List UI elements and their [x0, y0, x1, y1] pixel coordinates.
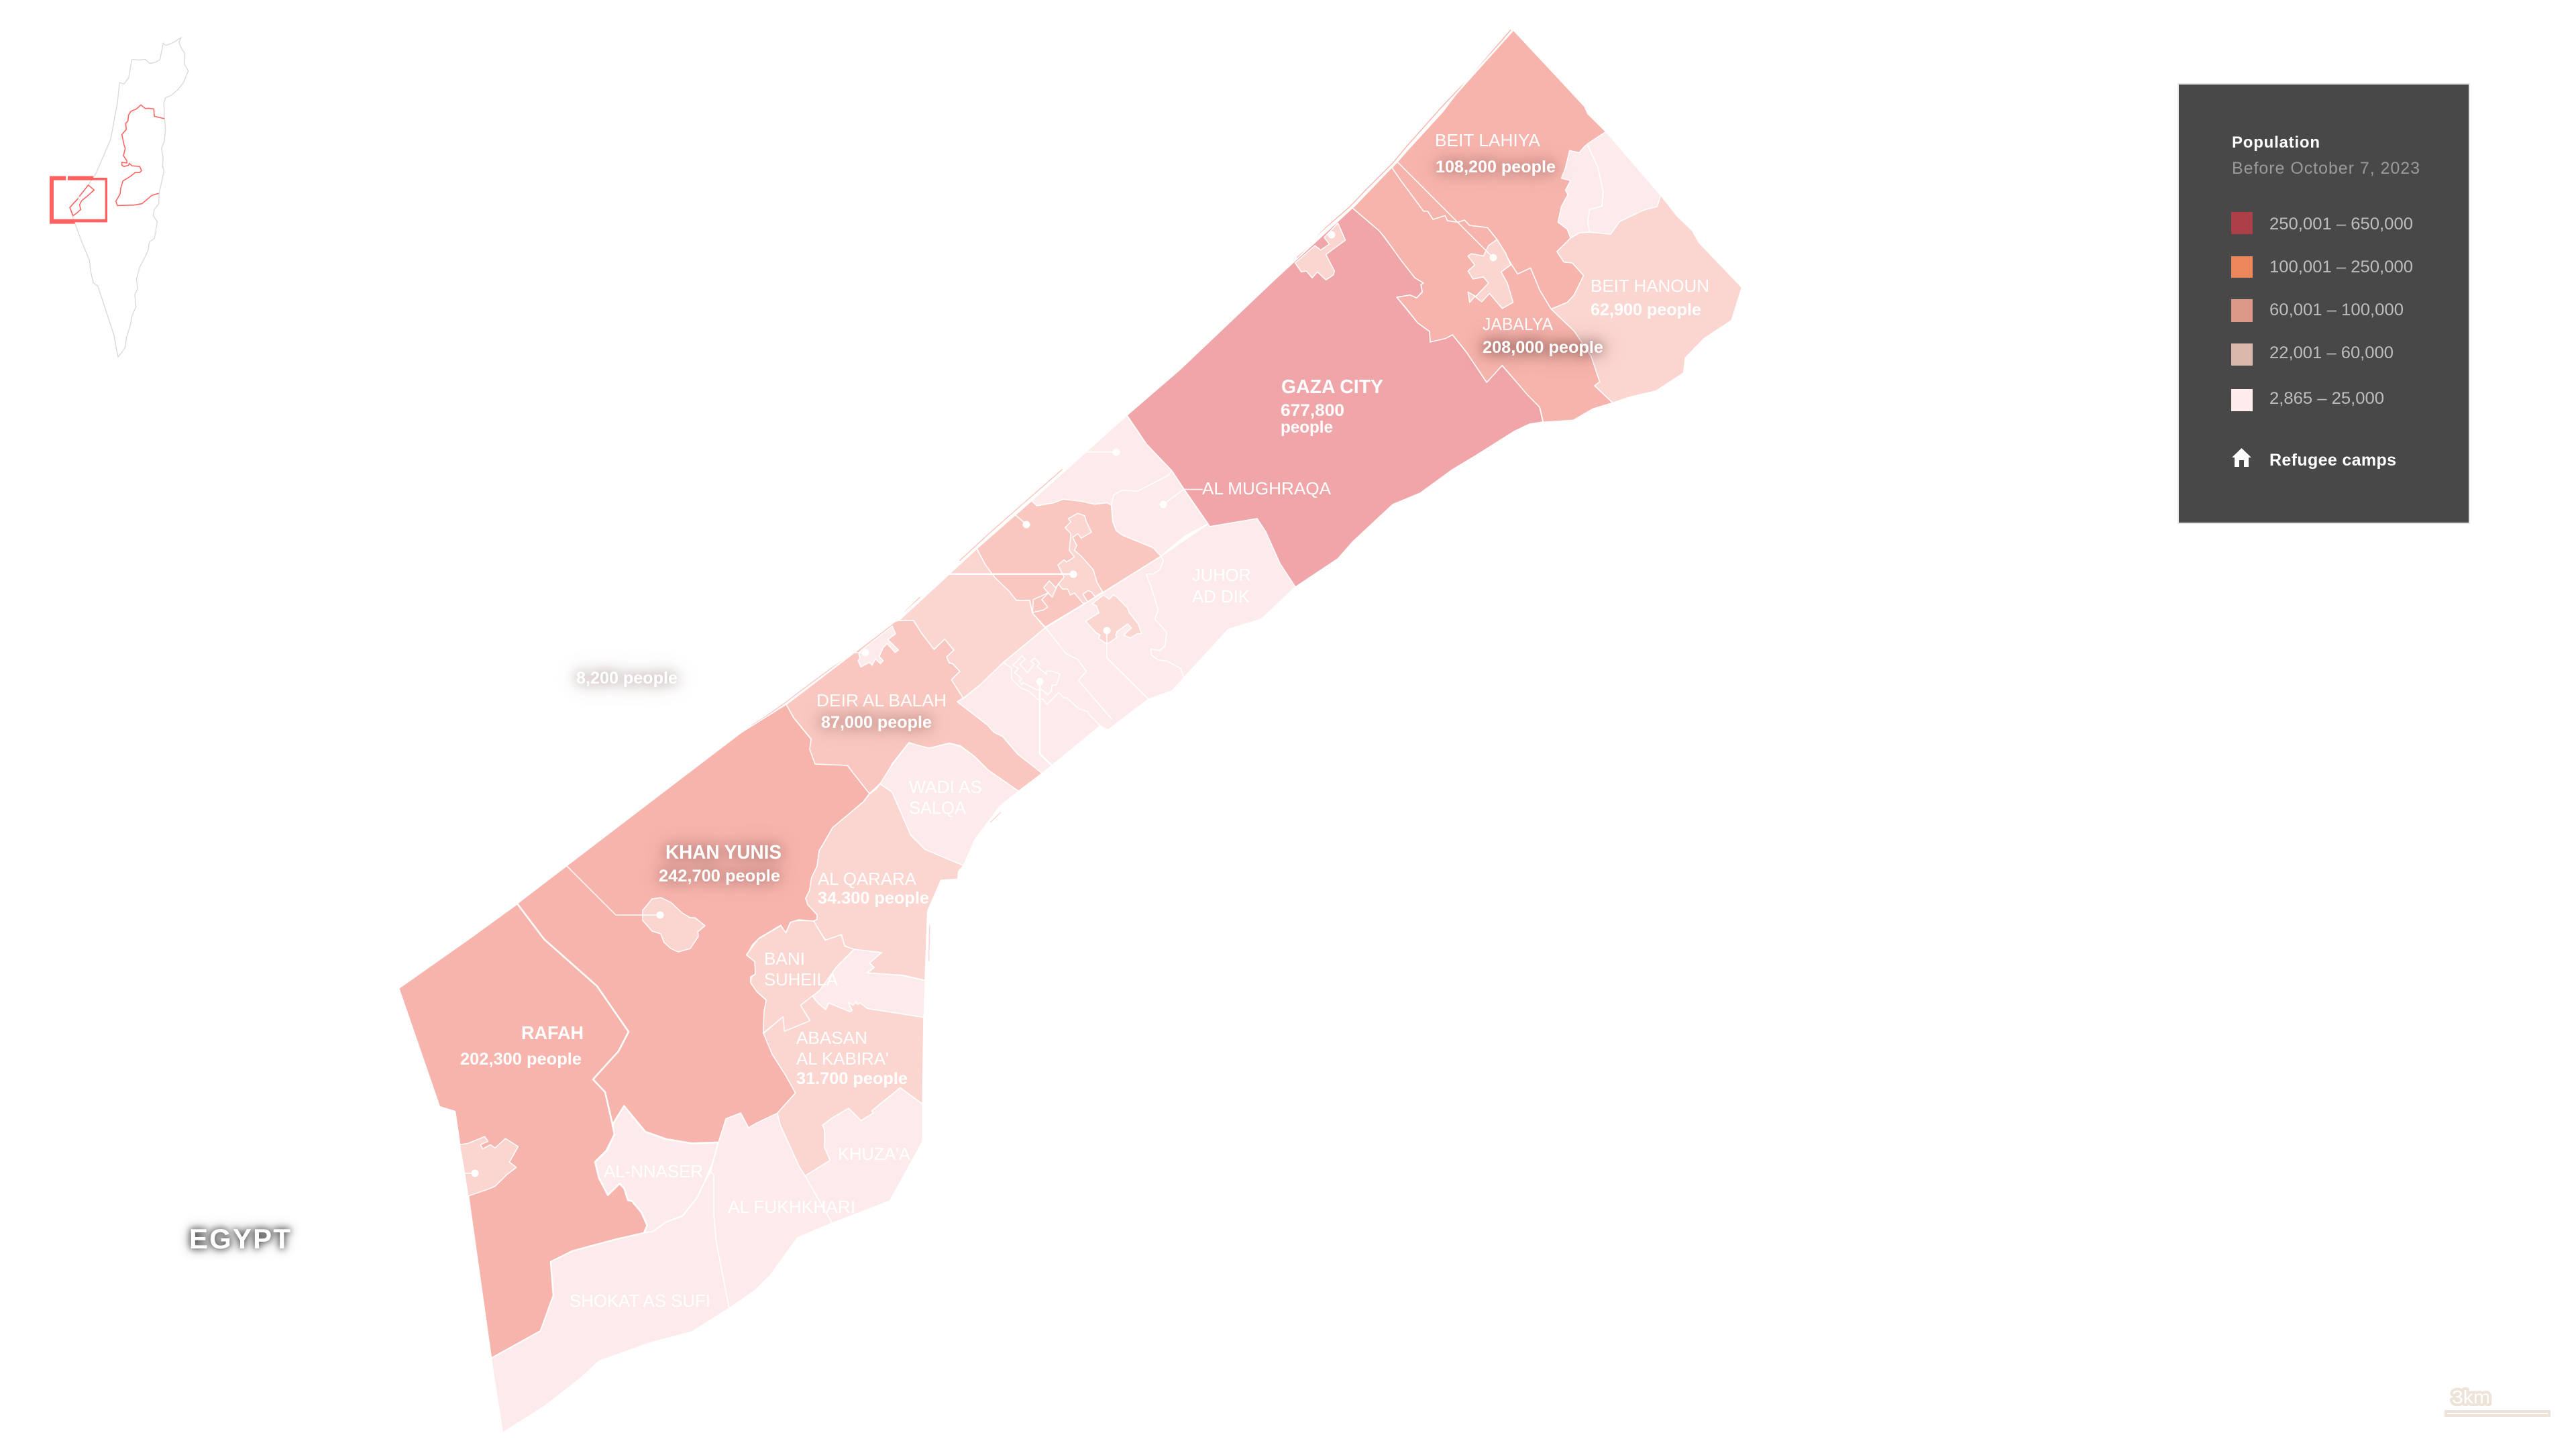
legend item: 100,001 – 250,000: 100,001 – 250,000 — [2269, 258, 2413, 276]
coast line north — [1275, 31, 1513, 279]
region group: north governorate — [1275, 30, 1741, 422]
region: Rafah — [398, 904, 647, 1358]
region: Jabalya — [1352, 162, 1613, 422]
legend item: refugee camps: Refugee camps — [2269, 451, 2396, 470]
region: Al Qarara — [806, 784, 963, 980]
label: Egypt: EGYPT — [189, 1223, 290, 1254]
legend item: 22,001 – 60,000 — [2231, 343, 2394, 366]
label: Wadi as Salqa: WADI AS — [909, 777, 982, 797]
inset: country outline — [70, 38, 189, 357]
camp leader: Jabalya — [1397, 162, 1493, 258]
label: Juhor ad Dik — [1192, 565, 1251, 606]
label: Gaza City: GAZA CITY — [1281, 376, 1383, 398]
region: Bani Suheila — [747, 920, 854, 1033]
label: Al Mughraqa: AL MUGHRAQA — [1202, 478, 1332, 498]
region group: Bani Suheila — [747, 920, 925, 1033]
region: Umm an-Nasr pale area — [1558, 131, 1661, 238]
inset: Gaza outline — [70, 185, 94, 215]
label: Jabalya: 208,000 people — [1483, 338, 1603, 357]
label: Gaza City: people — [1281, 418, 1333, 437]
label: Abasan Al Kabira: 31.700 people — [796, 1069, 908, 1088]
region: Abasan Al Kabira — [763, 996, 924, 1176]
icon: house — [2232, 448, 2251, 467]
legend item: 2,865 – 25,000 — [2231, 389, 2384, 411]
label: Khan Yunis: 242,700 people — [659, 867, 780, 885]
scale label: 3km — [2452, 1387, 2490, 1407]
legend item: 100,001 – 250,000 — [2231, 256, 2413, 278]
label: Jabalya — [1483, 314, 1603, 357]
label: Abasan Al Kabira — [796, 1028, 908, 1088]
legend title: Population — [2232, 133, 2320, 152]
label: Khan Yunis — [659, 842, 782, 885]
legend item: 2,865 – 25,000: 2,865 – 25,000 — [2269, 389, 2384, 408]
label: Beit Hanoun: BEIT HANOUN — [1591, 276, 1709, 296]
label: sea population: 8,200 people — [576, 669, 678, 688]
place labels — [189, 130, 1709, 1311]
region group: middle area north — [977, 415, 1208, 627]
legend item: 60,001 – 100,000: 60,001 – 100,000 — [2269, 301, 2404, 319]
label: Rafah — [460, 1022, 584, 1069]
region: Shokat as Sufi — [491, 1172, 729, 1433]
refugee camp: Nuseirat — [1044, 513, 1103, 603]
refugee camp: Rafah — [460, 1136, 518, 1196]
label: Beit Lahiya: 108,200 people — [1436, 158, 1556, 176]
camp markers — [471, 231, 1497, 1177]
region: Wadi as Salqa — [880, 743, 1019, 865]
label: Khan Yunis: KHAN YUNIS — [665, 842, 782, 863]
label: Beit Hanoun: 62,900 people — [1591, 301, 1701, 319]
scale bar — [2445, 1387, 2551, 1417]
label: Al-Nnaser: AL-NNASER — [604, 1161, 703, 1181]
label: Jabalya: JABALYA — [1483, 314, 1554, 334]
inset: highlight frame — [50, 176, 107, 224]
refugee camps: Bureij and Maghazi — [1004, 595, 1142, 726]
label: Deir Al Balah: DEIR AL BALAH — [816, 690, 947, 710]
label: Wadi as Salqa: SALQA — [909, 798, 967, 818]
camp leader lines and markers — [460, 231, 1497, 1177]
label: Al Qarara: AL QARARA — [818, 869, 917, 889]
label: Bani Suheila: BANI — [764, 949, 805, 969]
leader lines — [948, 452, 1203, 765]
legend item: refugee camps — [2232, 448, 2396, 470]
region: Nuseirat — [977, 499, 1161, 627]
refugee camp: Khan Yunis — [643, 898, 705, 952]
region: Beit Hanoun — [1551, 195, 1741, 402]
coastal slivers — [751, 30, 1511, 961]
label: Deir Al Balah: 87,000 people — [821, 713, 932, 732]
region: Khuza'a — [805, 1088, 922, 1223]
label: Khuza'a: KHUZA'A — [838, 1144, 911, 1164]
region: Al-Nnaser — [595, 1106, 718, 1233]
internal boundaries: middle area — [1045, 556, 1184, 719]
region: Gaza City — [1127, 208, 1543, 587]
label: Shokat as Sufi: SHOKAT AS SUFI — [570, 1291, 710, 1311]
label: Bani Suheila — [764, 949, 839, 989]
region: Bureij, Maghazi and Juhor ad Dik — [957, 519, 1295, 773]
legend item: 250,001 – 650,000 — [2231, 212, 2413, 234]
label: Juhor ad Dik: JUHOR — [1192, 565, 1251, 585]
label: Gaza City — [1281, 376, 1383, 437]
region: Deir Al Balah — [738, 574, 1042, 794]
region group: Al Qarara and Wadi as Salqa — [806, 743, 1019, 980]
label: Abasan Al Kabira: AL KABIRA' — [796, 1049, 889, 1069]
legend item: 250,001 – 650,000: 250,001 – 650,000 — [2269, 215, 2413, 233]
region: Al Mughraqa pale area — [1032, 415, 1208, 556]
label: Beit Lahiya: BEIT LAHIYA — [1435, 130, 1541, 150]
inset locator map — [50, 38, 189, 357]
region: Al Fukhkhari — [710, 1113, 832, 1308]
refugee camp: Deir Al Balah — [858, 626, 898, 667]
label: Wadi as Salqa — [909, 777, 982, 818]
label: Bani Suheila: SUHEILA — [764, 969, 839, 989]
refugee camp: Beach — [1295, 223, 1346, 280]
label: Gaza City: 677,800 — [1281, 401, 1344, 420]
label: Rafah: 202,300 people — [460, 1050, 582, 1069]
label: Abasan Al Kabira: ABASAN — [796, 1028, 867, 1048]
region: Beit Lahiya — [1392, 30, 1606, 309]
panel: legend — [2178, 84, 2469, 523]
label: Al Fukhkhari: AL FUKHKHARI — [728, 1197, 855, 1217]
legend item: 60,001 – 100,000 — [2231, 299, 2404, 322]
label: Al Qarara: 34.300 people — [818, 889, 929, 908]
region: Az Zawayda — [899, 549, 1045, 698]
label: Rafah: RAFAH — [521, 1022, 584, 1043]
legend subtitle: Before October 7, 2023 — [2232, 159, 2420, 178]
label: Deir Al Balah — [816, 690, 947, 732]
label: Beit Hanoun — [1591, 276, 1709, 319]
label: Beit Lahiya — [1435, 130, 1556, 176]
label: Al Qarara — [818, 869, 929, 908]
region group: south Khan Yunis and Rafah — [460, 996, 924, 1433]
region: Khan Yunis east pale area — [812, 949, 925, 1018]
refugee camp: Jabalya — [1468, 239, 1513, 309]
inset: West Bank outline — [116, 105, 164, 205]
label: Juhor ad Dik: AD DIK — [1192, 586, 1250, 606]
region: Khan Yunis — [517, 704, 869, 1143]
legend item: 22,001 – 60,000: 22,001 – 60,000 — [2269, 343, 2394, 362]
